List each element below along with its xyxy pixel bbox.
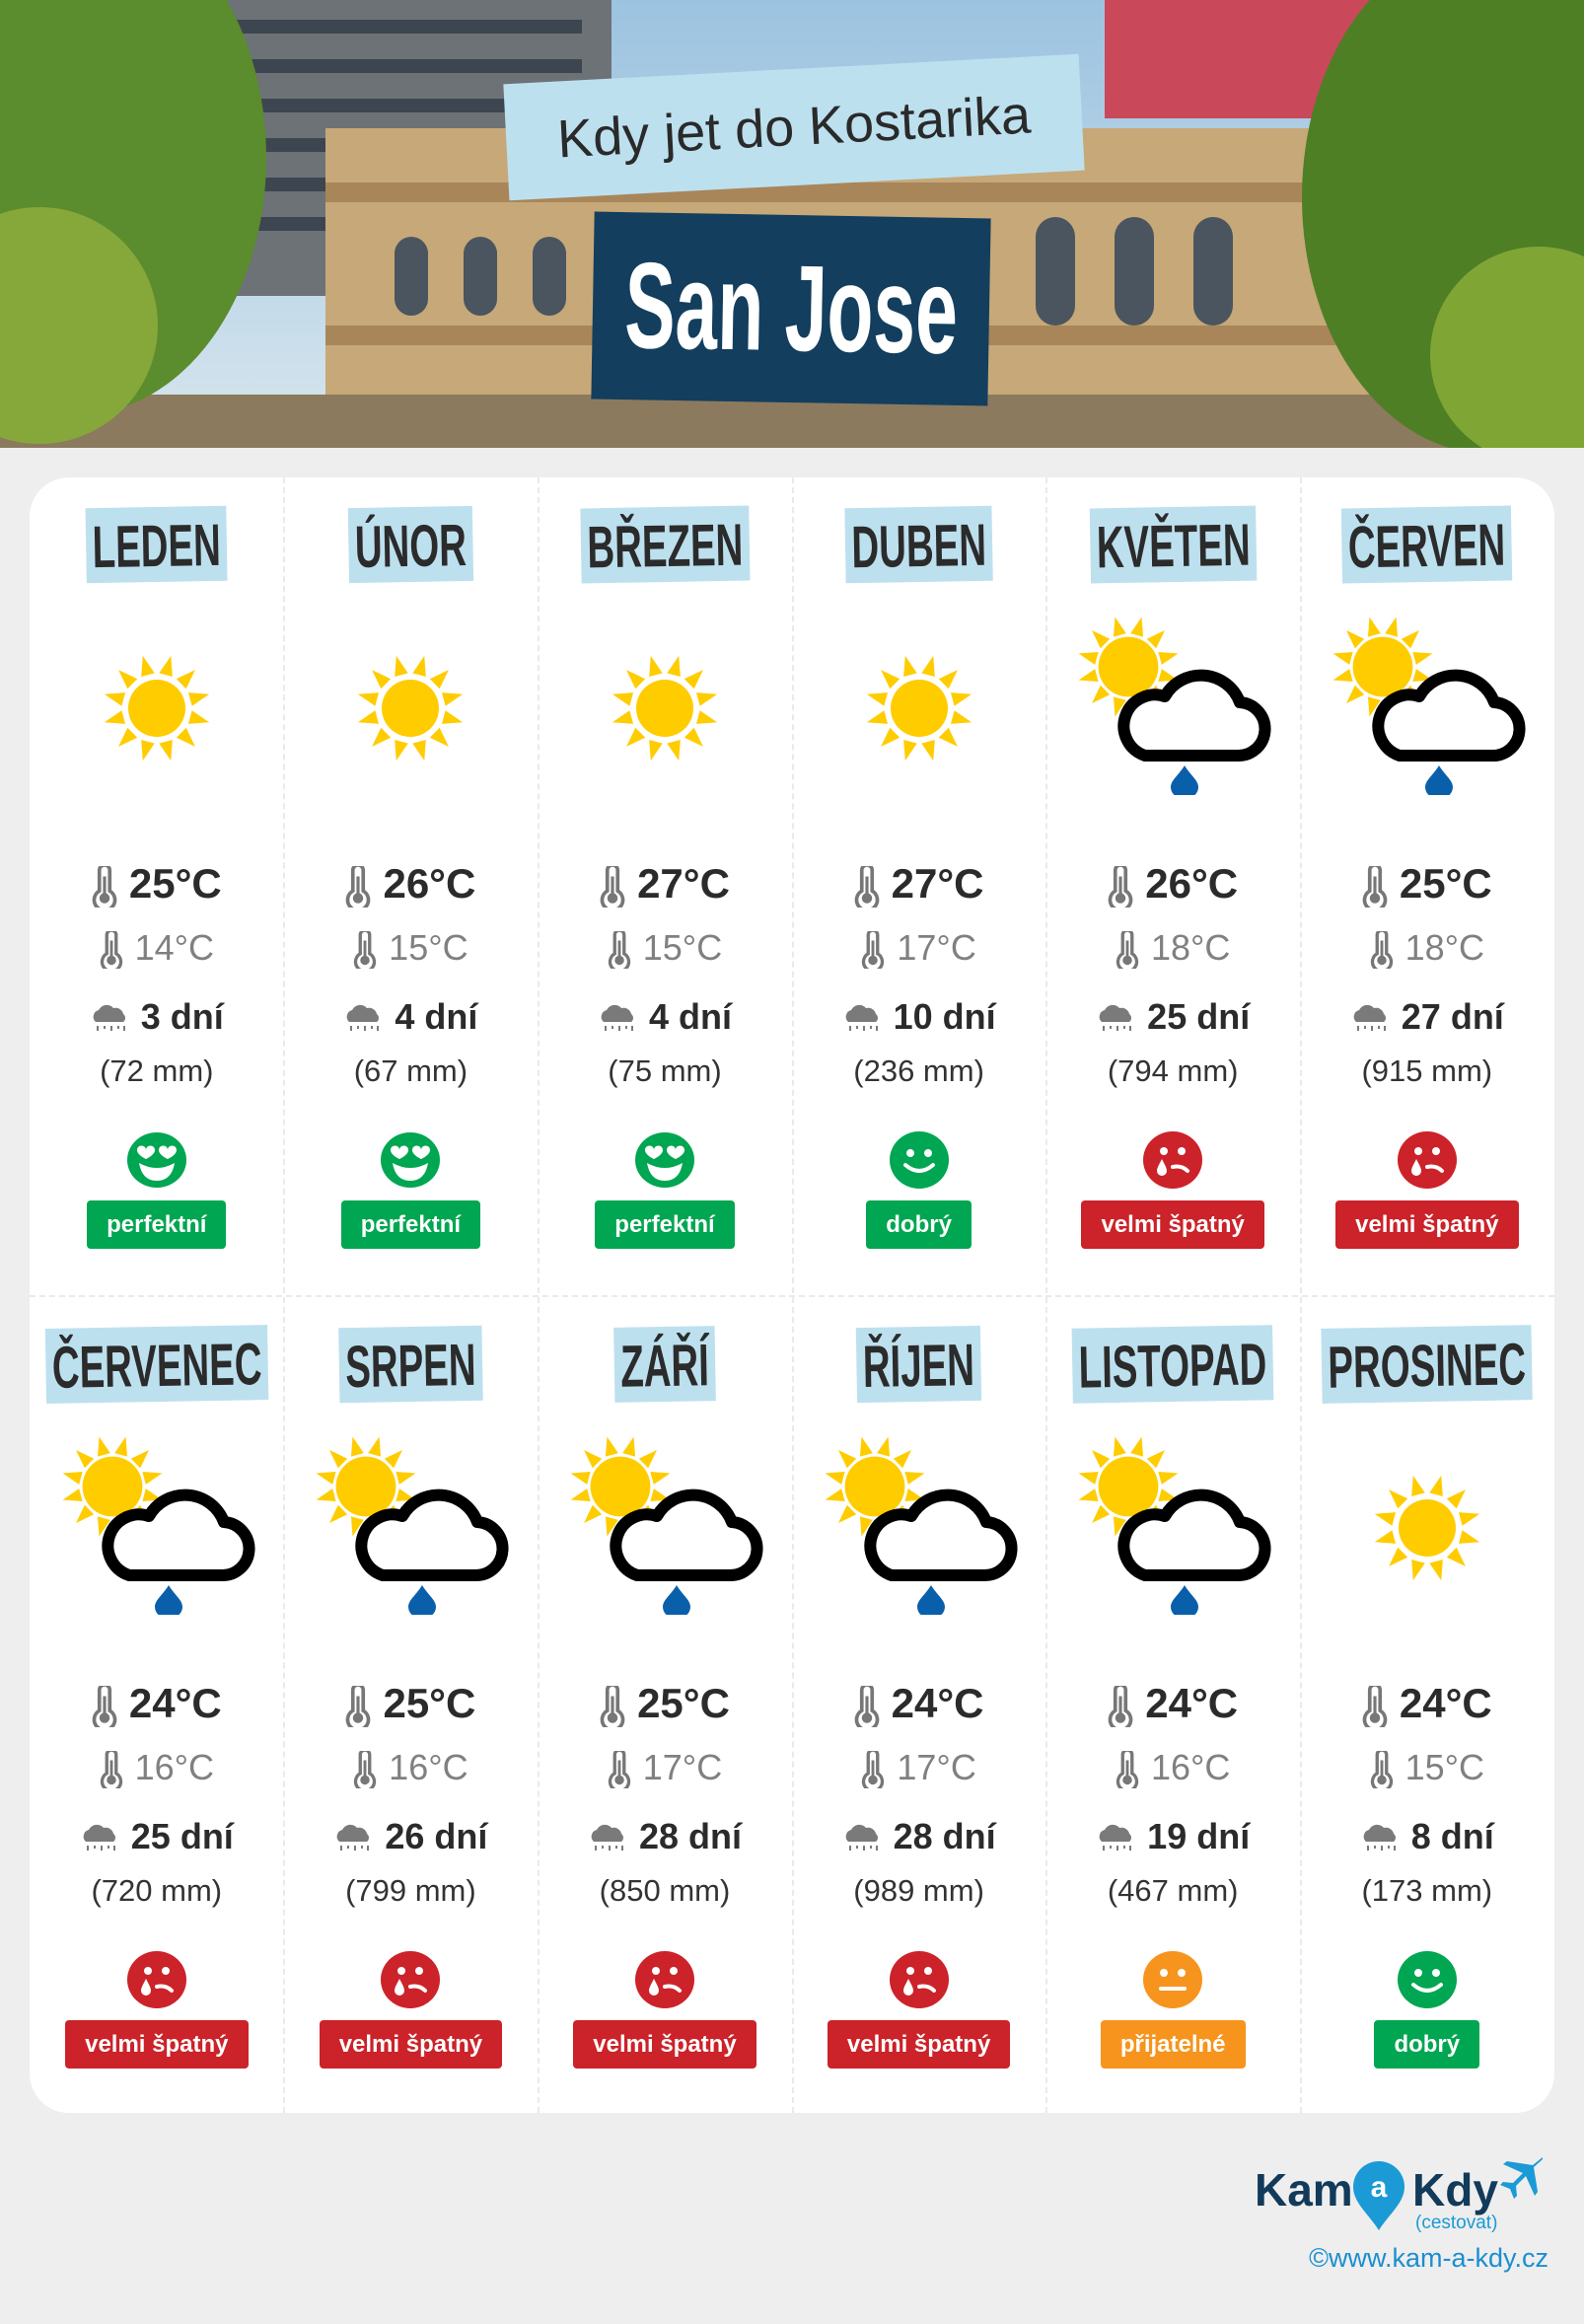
rain days: 8 dní: [1411, 1816, 1494, 1856]
badge: perfektní: [361, 1211, 461, 1238]
min temp: 16°C: [135, 1747, 214, 1787]
panel: prosinec: [1300, 1297, 1554, 2115]
panel: srpen: [284, 1297, 538, 2115]
rain days: 19 dní: [1147, 1816, 1250, 1856]
logo: [1255, 2155, 1550, 2234]
month label: ŘÍJEN: [862, 1332, 975, 1400]
rain days: 4 dní: [649, 996, 732, 1037]
min temp: 16°C: [389, 1747, 468, 1787]
rain days: [1099, 996, 1251, 1037]
min temp: [284, 1747, 538, 1788]
rainfall: (989 mm): [853, 1873, 984, 1908]
badge: velmi špatný: [85, 2031, 229, 2058]
panel: listopad: [1045, 1297, 1300, 2115]
panel: brezen: [580, 505, 750, 1249]
min temp: 17°C: [897, 927, 976, 968]
icon: sun: [1371, 1472, 1483, 1584]
min temp: [862, 927, 976, 969]
icon: face: [381, 1132, 440, 1188]
month label: ČERVEN: [1348, 512, 1506, 580]
month label: ČERVENEC: [51, 1331, 262, 1401]
month label: SRPEN: [345, 1332, 476, 1400]
min temp: [792, 1747, 1045, 1788]
badge: velmi špatný: [847, 2031, 990, 2058]
badge: velmi špatný: [339, 2031, 482, 2058]
min temp: 18°C: [1151, 927, 1230, 968]
min temp: [101, 927, 214, 969]
min temp: [30, 1747, 284, 1788]
icon: sun: [612, 656, 717, 761]
icon: plane: [1497, 2155, 1547, 2201]
rainfall: (467 mm): [1108, 1873, 1239, 1908]
rain days: [602, 996, 733, 1037]
rain days: [284, 1816, 538, 1857]
icon: sun cloud rain: [821, 1437, 1018, 1615]
badge: dobrý: [886, 1211, 952, 1238]
rainfall: (173 mm): [1361, 1873, 1492, 1908]
icon: face: [1397, 1949, 1458, 2010]
panel: rijen: [792, 1297, 1045, 2115]
rainfall: (915 mm): [1361, 1053, 1492, 1088]
badge: velmi špatný: [593, 2031, 737, 2058]
icon: face: [127, 1132, 186, 1188]
rainfall: (75 mm): [608, 1053, 722, 1088]
max temp: [600, 860, 730, 908]
month label: PROSINEC: [1328, 1331, 1527, 1401]
title banner: Kdy jet do Kostarika: [556, 85, 1032, 170]
logo: Kam: [1255, 2164, 1353, 2215]
min temp: 14°C: [135, 927, 214, 968]
max temp: [1300, 1680, 1554, 1727]
min temp: 15°C: [1405, 1747, 1484, 1787]
rain days: 28 dní: [639, 1816, 742, 1856]
rain days: 28 dní: [894, 1816, 996, 1856]
max temp: 25°C: [383, 1680, 475, 1726]
max temp: 24°C: [1145, 1680, 1238, 1726]
min temp: [1300, 1747, 1554, 1788]
max temp: [284, 1680, 538, 1727]
icon: sun cloud rain: [312, 1437, 509, 1615]
max temp: 24°C: [892, 1680, 984, 1726]
month label: ZÁŘÍ: [620, 1332, 709, 1400]
rain days: [846, 996, 997, 1037]
panel: cerven: [1300, 477, 1554, 1295]
rain days: [347, 996, 479, 1037]
max temp: 24°C: [129, 1680, 222, 1726]
rain days: 26 dní: [385, 1816, 487, 1856]
max temp: 24°C: [1400, 1680, 1492, 1726]
rain days: 10 dní: [894, 996, 996, 1037]
min temp: 15°C: [389, 927, 468, 968]
icon: face: [380, 1949, 441, 2010]
badge: velmi špatný: [1355, 1211, 1499, 1238]
icon: face: [126, 1949, 187, 2010]
rain days: 27 dní: [1402, 996, 1504, 1037]
icon: face: [1142, 1949, 1203, 2010]
icon: face: [1397, 1129, 1458, 1191]
icon: sun: [105, 656, 209, 761]
min temp: 16°C: [1151, 1747, 1230, 1787]
month label: KVĚTEN: [1096, 512, 1251, 580]
max temp: 26°C: [383, 860, 475, 907]
city title: [591, 212, 991, 405]
rainfall: (850 mm): [600, 1873, 730, 1908]
min temp: [1300, 927, 1554, 969]
logo: (cestovat): [1415, 2213, 1497, 2233]
icon: sun: [358, 656, 463, 761]
icon: sun cloud rain: [566, 1437, 763, 1615]
panel: unor: [341, 505, 480, 1249]
rain days: [1300, 1816, 1554, 1857]
max temp: [538, 1680, 792, 1727]
month label: ÚNOR: [354, 512, 468, 580]
rainfall: (236 mm): [853, 1053, 984, 1088]
icon: pin: [1351, 2159, 1406, 2230]
icon: face: [1143, 1131, 1202, 1189]
city title: San Jose: [623, 238, 959, 380]
min temp: [538, 1747, 792, 1788]
icon: pin: a: [1371, 2171, 1388, 2204]
max temp: [1045, 1680, 1300, 1727]
icon: sun cloud rain: [1079, 617, 1271, 795]
max temp: 27°C: [892, 860, 984, 907]
source url: ©www.kam-a-kdy.cz: [1309, 2243, 1548, 2273]
rainfall: (72 mm): [100, 1053, 213, 1088]
header photo: [0, 0, 1584, 448]
max temp: [792, 1680, 1045, 1727]
rainfall: (799 mm): [345, 1873, 476, 1908]
panel: months card: [30, 477, 1554, 2113]
icon: sun cloud rain: [1329, 617, 1526, 795]
icon: sun: [867, 656, 972, 761]
badge: perfektní: [614, 1211, 715, 1238]
icon: face: [634, 1949, 695, 2010]
min temp: [353, 927, 468, 969]
month label: LISTOPAD: [1078, 1331, 1267, 1401]
rainfall: (720 mm): [91, 1873, 222, 1908]
icon: face: [890, 1131, 949, 1189]
rain days: 3 dní: [141, 996, 224, 1037]
badge: velmi špatný: [1101, 1211, 1245, 1238]
min temp: 15°C: [643, 927, 722, 968]
min temp: 17°C: [643, 1747, 722, 1787]
icon: sun cloud rain: [1074, 1437, 1271, 1615]
max temp: [1300, 860, 1554, 908]
month label: LEDEN: [92, 512, 221, 580]
max temp: [30, 1680, 284, 1727]
rainfall: (67 mm): [354, 1053, 468, 1088]
panel: leden: [85, 505, 227, 1249]
icon: face: [635, 1132, 694, 1188]
badge: dobrý: [1394, 2031, 1460, 2058]
month label: DUBEN: [851, 512, 986, 580]
rainfall: (794 mm): [1108, 1053, 1239, 1088]
logo: Kdy: [1412, 2164, 1498, 2215]
panel: cervenec: [30, 1297, 284, 2115]
max temp: [345, 860, 475, 908]
min temp: [1116, 927, 1230, 969]
panel: zari: [538, 1297, 792, 2115]
min temp: [1045, 1747, 1300, 1788]
rain days: [538, 1816, 792, 1857]
icon: face: [889, 1949, 950, 2010]
max temp: 25°C: [1400, 860, 1492, 907]
min temp: 18°C: [1405, 927, 1484, 968]
badge: perfektní: [107, 1211, 206, 1238]
rain days: [1045, 1816, 1300, 1857]
rain days: 25 dní: [131, 1816, 234, 1856]
max temp: 25°C: [637, 1680, 730, 1726]
month label: BŘEZEN: [586, 512, 744, 580]
panel: duben: [844, 505, 997, 1249]
badge: přijatelné: [1120, 2031, 1226, 2058]
title banner: [503, 54, 1085, 200]
rain days: [792, 1816, 1045, 1857]
icon: sun cloud rain: [58, 1437, 255, 1615]
min temp: 17°C: [897, 1747, 976, 1787]
rain days: 4 dní: [395, 996, 477, 1037]
max temp: 27°C: [637, 860, 730, 907]
max temp: [1109, 860, 1238, 908]
rain days: [93, 996, 225, 1037]
max temp: 26°C: [1145, 860, 1238, 907]
panel: kveten: [1079, 505, 1271, 1249]
rain days: [30, 1816, 284, 1857]
rain days: 25 dní: [1147, 996, 1250, 1037]
max temp: 25°C: [129, 860, 222, 907]
min temp: [608, 927, 722, 969]
rain days: [1300, 996, 1554, 1038]
